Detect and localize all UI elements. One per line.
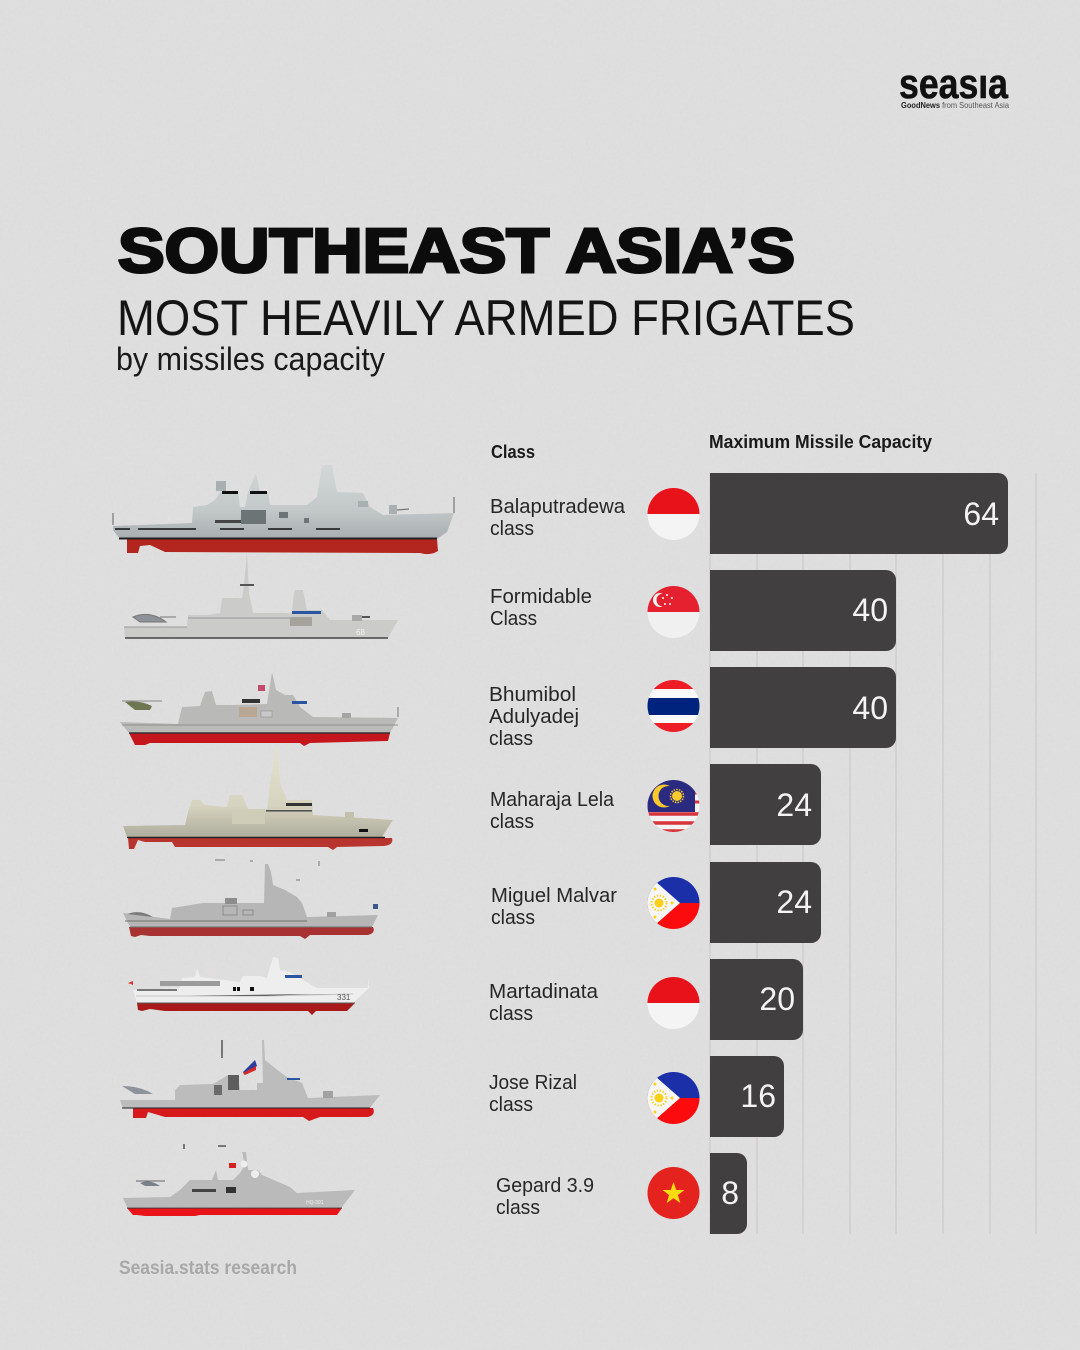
row: Gepard 3.9 class: 8 <box>721 1175 739 1211</box>
row: Bhumibol Adulyadej class: Adulyadej <box>489 706 579 728</box>
row: Martadinata class <box>489 959 803 1040</box>
row: Gepard 3.9 class: class <box>496 1197 540 1219</box>
column header: maximum missile capacity: Maximum Missile Capacity <box>709 432 932 452</box>
row: Martadinata class: 20 <box>759 981 795 1017</box>
title: MOST HEAVILY ARMED FRIGATES <box>117 290 855 346</box>
logo: seasia: GoodNews from Southeast Asia <box>901 101 1010 110</box>
ship: Martadinata: 331 <box>337 993 351 1002</box>
title: SOUTHEAST ASIA’S <box>118 217 795 286</box>
row: Martadinata class: Martadinata <box>489 981 599 1003</box>
row: Jose Rizal class: class <box>489 1094 533 1116</box>
row: Miguel Malvar class <box>491 862 821 943</box>
ship: Formidable: 68 <box>356 628 365 637</box>
row: Maharaja Lela class: Maharaja Lela <box>490 789 615 811</box>
row: Jose Rizal class: Jose Rizal <box>489 1072 577 1094</box>
row: Miguel Malvar class: Miguel Malvar <box>491 885 617 907</box>
row: Balaputradewa class: 64 <box>963 496 999 532</box>
row: Bhumibol Adulyadej class: 40 <box>852 690 888 726</box>
row: Maharaja Lela class <box>490 764 821 845</box>
row: Jose Rizal class <box>489 1056 784 1137</box>
ship: Jose Rizal <box>120 1040 380 1121</box>
row: Maharaja Lela class: 24 <box>776 787 812 823</box>
row: Maharaja Lela class: class <box>490 811 534 833</box>
chart grid lines <box>710 473 1036 1234</box>
infographic canvas <box>112 75 1036 1274</box>
row: Bhumibol Adulyadej class: Bhumibol <box>489 684 576 706</box>
ship: Gepard 3.9 <box>123 1144 355 1216</box>
row: Formidable Class <box>490 570 896 651</box>
row: Gepard 3.9 class <box>496 1153 747 1234</box>
row: Formidable Class: Formidable <box>490 586 592 608</box>
title <box>116 217 855 377</box>
ship: Martadinata <box>128 957 369 1015</box>
column header: class: Class <box>491 442 535 462</box>
row: Gepard 3.9 class: Gepard 3.9 <box>496 1175 594 1197</box>
row: Balaputradewa class: Balaputradewa <box>490 496 626 518</box>
ship: Miguel Malvar <box>123 860 378 939</box>
ship: Balaputradewa <box>113 465 454 554</box>
row: Martadinata class: class <box>489 1003 533 1025</box>
ship: Gepard 3.9: HQ-391 <box>306 1200 324 1206</box>
logo: seasia: seasia <box>899 60 1009 107</box>
row: Formidable Class: Class <box>490 608 537 630</box>
row: Formidable Class: 40 <box>852 592 888 628</box>
ship: Formidable <box>124 553 398 638</box>
row: Miguel Malvar class: class <box>491 907 535 929</box>
row: Miguel Malvar class: 24 <box>776 884 812 920</box>
title: by missiles capacity <box>116 341 385 377</box>
row: Bhumibol Adulyadej class <box>489 667 896 750</box>
ship: Maharaja Lela <box>123 747 393 850</box>
row: Bhumibol Adulyadej class: class <box>489 728 533 750</box>
row: Balaputradewa class: class <box>490 518 534 540</box>
source note: Seasia.stats research <box>119 1258 297 1279</box>
row: Balaputradewa class <box>490 473 1008 554</box>
ship: Bhumibol Adulyadej <box>120 672 398 746</box>
row: Jose Rizal class: 16 <box>740 1078 776 1114</box>
